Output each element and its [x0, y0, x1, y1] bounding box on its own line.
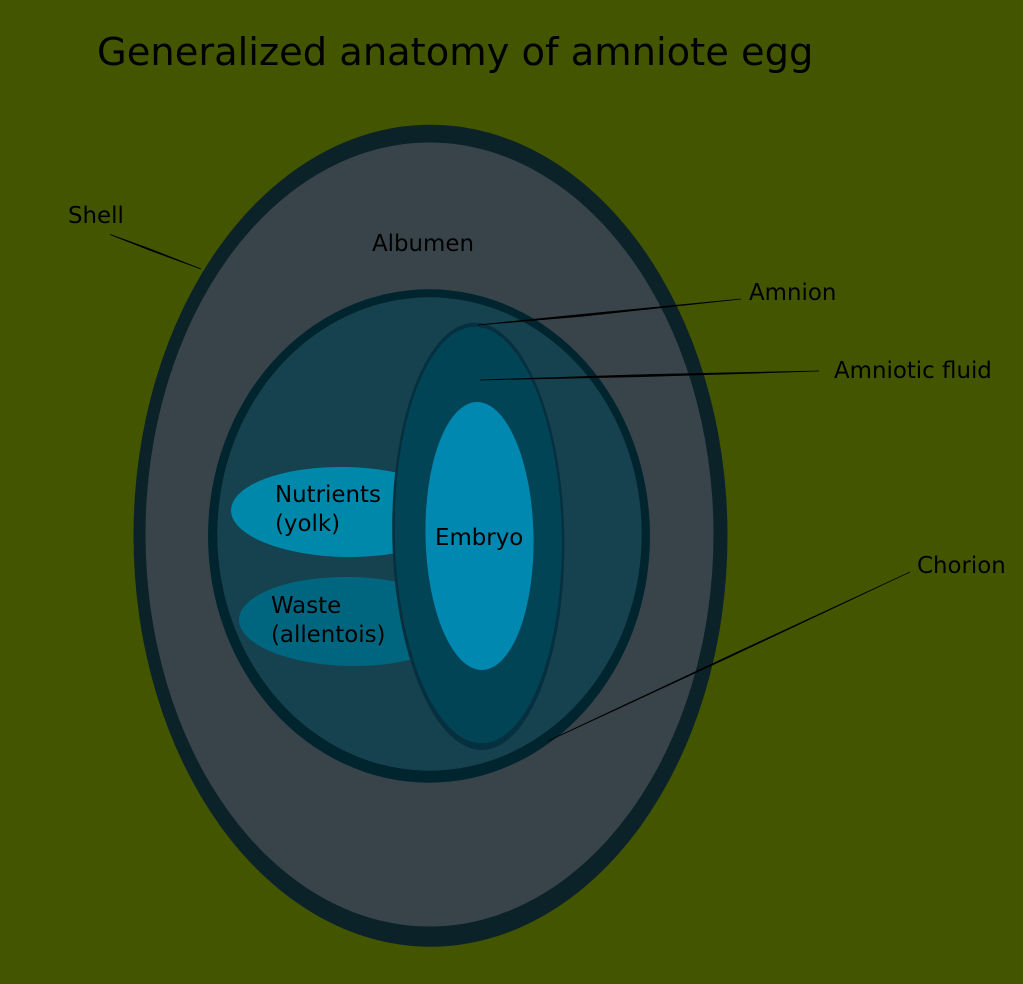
label: shell: Shell	[68, 203, 124, 229]
embryo	[423, 401, 536, 671]
yolk sac	[230, 465, 460, 559]
label: nutrients: Nutrients	[275, 482, 381, 508]
shell	[134, 125, 728, 947]
leader line: chorion	[548, 572, 910, 741]
label: waste: Waste	[271, 593, 341, 619]
leader line: shell	[110, 234, 201, 269]
leader line: amniotic fluid	[480, 371, 819, 380]
label: yolk: (yolk)	[275, 511, 340, 537]
allantois	[238, 575, 462, 668]
label: albumen: Albumen	[372, 231, 474, 257]
amnion ring	[388, 321, 568, 752]
albumen	[146, 142, 714, 926]
amniotic fluid	[391, 325, 566, 745]
chorion ring	[208, 289, 650, 783]
label: amniotic fluid: Amniotic fluid	[834, 358, 992, 384]
chorion interior	[217, 297, 642, 771]
label: chorion: Chorion	[917, 553, 1006, 579]
egg diagram	[134, 125, 728, 947]
leader line: amnion	[478, 299, 741, 325]
title: Generalized anatomy of amniote egg	[97, 30, 813, 75]
label: allentois: (allentois)	[271, 622, 385, 648]
label: embryo: Embryo	[435, 525, 523, 551]
label: amnion: Amnion	[749, 280, 836, 306]
